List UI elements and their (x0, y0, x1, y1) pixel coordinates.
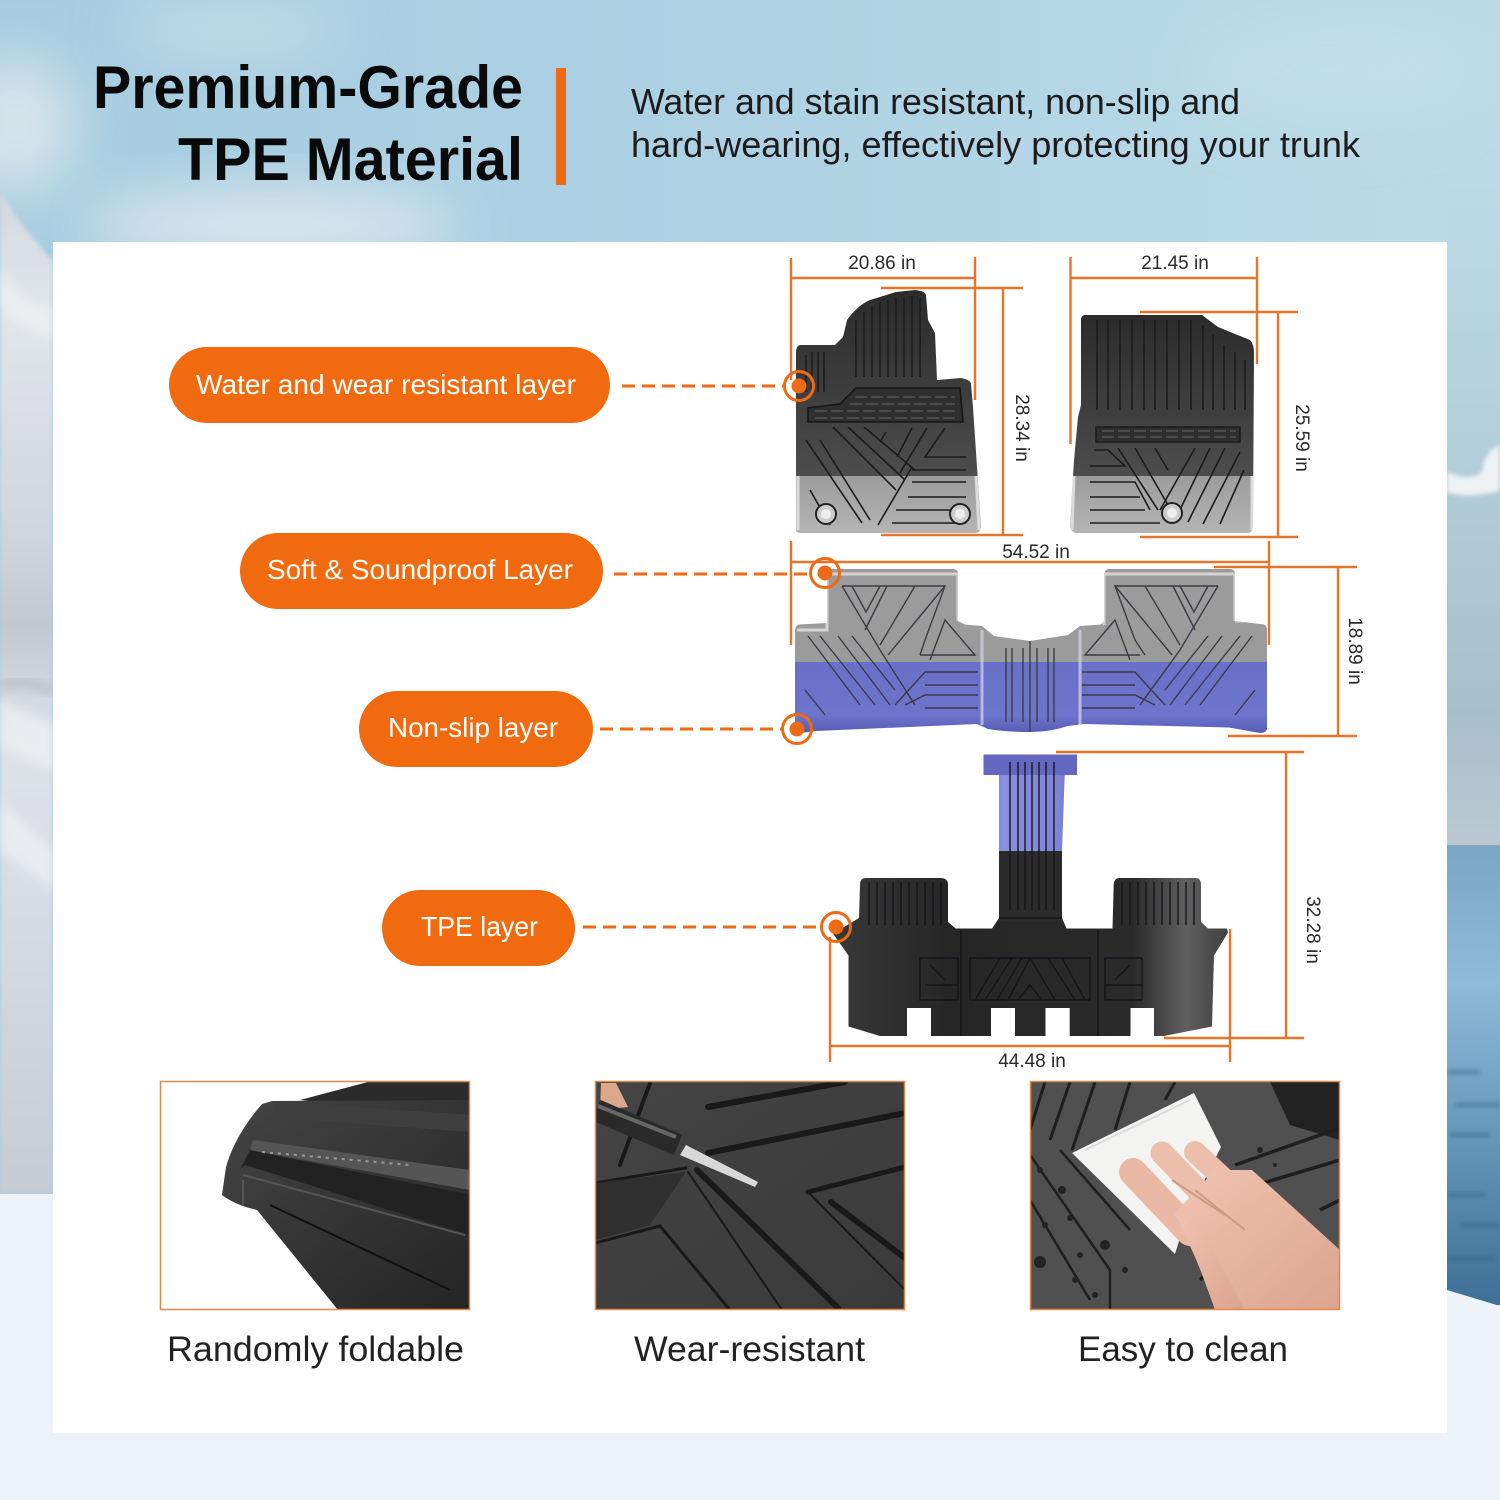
dimension labels: 21.45 in (1141, 253, 1209, 274)
dimension labels: 54.52 in (1002, 542, 1070, 563)
second row mat (790, 565, 1270, 733)
white content panel (53, 242, 1447, 1433)
dimension labels: 28.34 in (1011, 394, 1032, 462)
photo: easy to clean (1030, 1081, 1340, 1310)
dimension labels: 32.28 in (1302, 896, 1323, 964)
callout: non-slip layer: Non-slip layer (388, 712, 558, 743)
dimension labels: 20.86 in (848, 253, 916, 274)
subtitle: hard-wearing, effectively protecting your trunk (631, 124, 1361, 165)
callout: non-slip layer (359, 691, 812, 767)
front left floor mat (790, 285, 985, 536)
callout: TPE layer: TPE layer (421, 911, 538, 942)
third row mat (825, 750, 1235, 1040)
subtitle: Water and stain resistant, non-slip and (631, 81, 1240, 122)
dimension labels: 25.59 in (1291, 404, 1312, 472)
front right floor mat (1065, 310, 1260, 536)
photo: wear-resistant (595, 1081, 905, 1310)
caption: randomly foldable: Randomly foldable (167, 1330, 464, 1369)
hand (1133, 1152, 1340, 1310)
callout: soft and soundproof layer (240, 533, 840, 609)
title: Premium-Grade (93, 54, 523, 121)
dimension labels: 44.48 in (998, 1051, 1066, 1072)
dimension lines (791, 257, 1357, 1062)
orange divider bar (556, 68, 566, 185)
callout: soft and soundproof layer: Soft & Soundproof Layer (267, 554, 573, 585)
caption: wear-resistant: Wear-resistant (634, 1330, 865, 1369)
callout: water and wear resistant layer: Water and wear resistant layer (196, 369, 576, 400)
title: TPE Material (178, 126, 523, 193)
subtitle (631, 81, 1361, 165)
callout: water and wear resistant layer (169, 347, 814, 423)
photo: randomly foldable (160, 1081, 470, 1310)
caption: easy to clean: Easy to clean (1078, 1330, 1288, 1369)
dimension labels (848, 253, 1365, 1072)
dimension labels: 18.89 in (1344, 617, 1365, 685)
title (93, 54, 523, 193)
callout: TPE layer (382, 890, 850, 966)
